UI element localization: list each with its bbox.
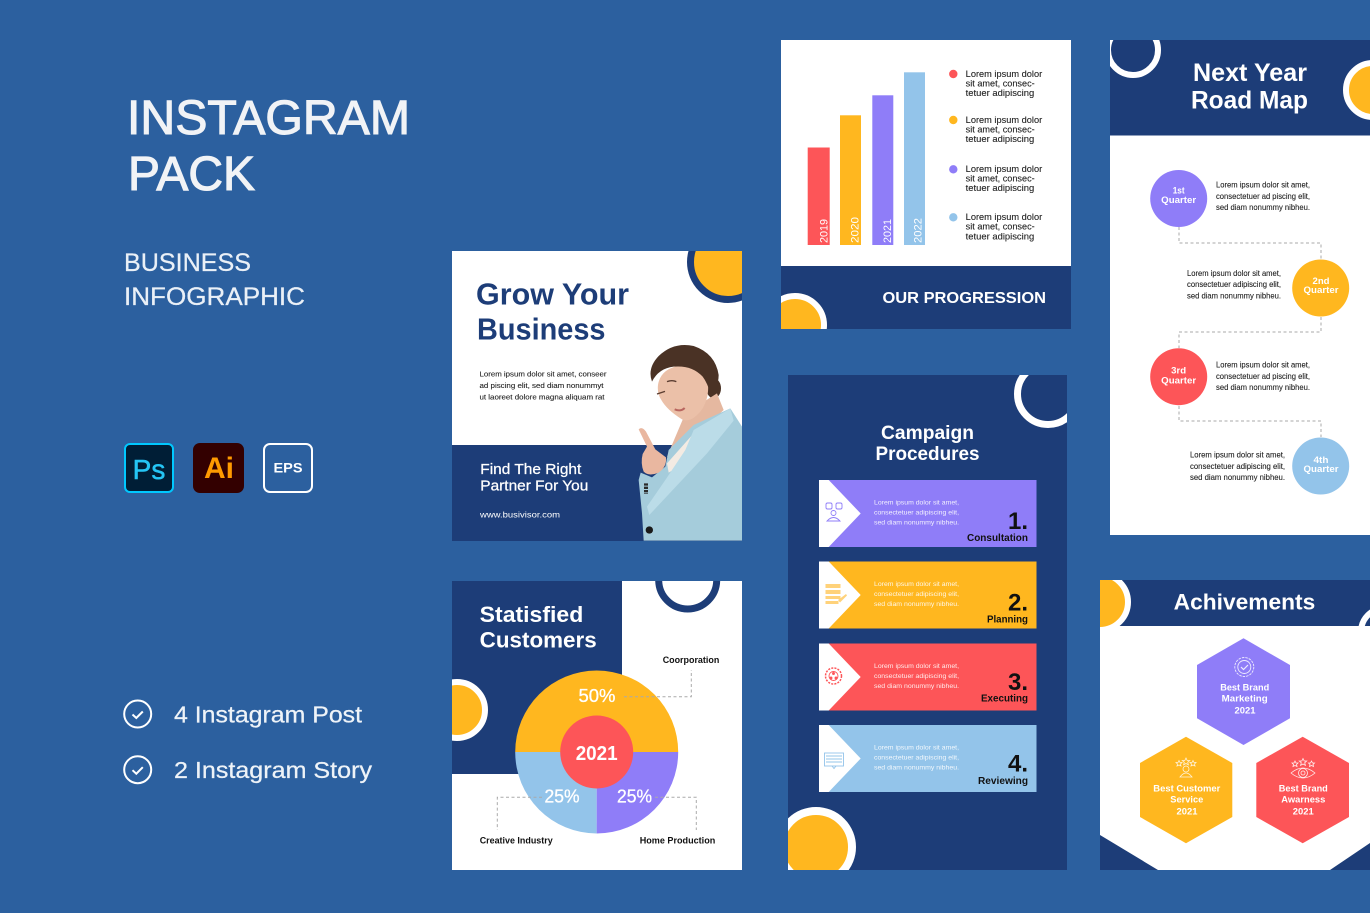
step 4	[819, 725, 1036, 792]
1st quarter: sed diam nonummy nibheu.	[1216, 203, 1310, 212]
body text: ad piscing elit, sed diam nonummyt	[480, 381, 604, 390]
3rd quarter: Quarter	[1161, 376, 1196, 386]
icon: eye stars	[1291, 758, 1315, 778]
corner circle	[687, 251, 742, 303]
2nd quarter: 2nd	[1312, 276, 1330, 287]
pie chart	[515, 670, 678, 834]
hexagon: best customer service	[1140, 737, 1232, 843]
buttons	[646, 526, 653, 534]
pie chart: 25%	[617, 786, 652, 806]
hexagon: best customer service: Service	[1170, 794, 1203, 806]
step 1	[819, 480, 1036, 547]
bar chart: 2019	[818, 219, 830, 243]
hexagon: best brand awareness: Awarness	[1281, 794, 1325, 806]
panel: road map	[1108, 25, 1370, 535]
blazer	[639, 408, 742, 541]
step 1: 1.	[1008, 508, 1028, 535]
4th quarter: Lorem ipsum dolor sit amet,	[1190, 450, 1285, 460]
heading: Road Map	[1191, 86, 1308, 114]
hexagon: best customer service: Best Customer	[1153, 784, 1221, 794]
4th quarter: consectetuer adipiscing elit,	[1190, 462, 1285, 471]
legend: tetuer adipiscing	[966, 134, 1034, 144]
step 3: 3.	[1008, 669, 1028, 696]
legend: Lorem ipsum dolor	[966, 164, 1042, 174]
step 4: consectetuer adipiscing elit,	[874, 755, 959, 762]
panel: achievements	[1072, 574, 1370, 870]
footer band	[452, 445, 742, 541]
4th quarter	[1190, 438, 1349, 494]
hexagon: best brand awareness: 2021	[1293, 806, 1315, 818]
icon: badge	[1235, 658, 1254, 676]
panel: grow your business	[452, 251, 742, 541]
step 3: Executing	[981, 693, 1028, 705]
icon: Photoshop: Ps	[133, 454, 165, 485]
software icons	[125, 443, 312, 493]
legend: Lorem ipsum dolor	[966, 212, 1042, 222]
step 1: Consultation	[967, 532, 1028, 544]
item: 2 Instagram Story: 2 Instagram Story	[174, 757, 373, 783]
icon: EPS	[264, 444, 312, 492]
title: INSTAGRAM	[127, 92, 410, 145]
heading	[876, 425, 979, 460]
4th quarter: sed diam nonummy nibheu.	[1190, 473, 1285, 482]
hexagon: best brand marketing: Marketing	[1222, 694, 1268, 704]
panel: our progression	[781, 40, 1071, 329]
heading: Business	[477, 312, 606, 346]
body text: ut laoreet dolore magna aliquam rat	[480, 392, 605, 401]
footer text: Find The Right	[480, 462, 581, 478]
hexagon: best customer service: 2021	[1176, 806, 1198, 818]
step 3: sed diam nonummy nibheu.	[874, 683, 959, 690]
heading	[477, 283, 629, 340]
step 3	[819, 644, 1036, 710]
legend: sit amet, consec-	[966, 222, 1035, 232]
step 1: sed diam nonummy nibheu.	[874, 520, 959, 527]
icon: customer stars	[1176, 758, 1196, 777]
pie chart: 50%	[578, 686, 616, 706]
step 4: Reviewing	[978, 775, 1028, 787]
pie chart: 25%	[544, 786, 580, 806]
icon: consultation	[826, 503, 842, 521]
step 4: Lorem ipsum dolor sit amet,	[874, 745, 959, 752]
4th quarter: 4th	[1314, 455, 1329, 466]
legend	[949, 69, 1042, 242]
legend: tetuer adipiscing	[966, 88, 1034, 98]
bar chart: 2022	[913, 218, 925, 243]
pie labels: Home Production	[640, 836, 716, 846]
title: PACK	[128, 148, 255, 201]
panel: satisfied customers	[452, 581, 742, 870]
legend: Lorem ipsum dolor	[966, 69, 1042, 79]
heading: Achivements	[1174, 590, 1315, 614]
item: 4 Instagram Post: 4 Instagram Post	[174, 702, 363, 728]
legend: sit amet, consec-	[966, 78, 1035, 88]
footer text: www.busivisor.com	[479, 510, 560, 520]
eyes and mouth	[657, 381, 676, 394]
heading: Grow Your	[476, 276, 629, 312]
heading: Statisfied	[480, 602, 583, 627]
heading	[1191, 59, 1308, 114]
1st quarter: consectetuer ad piscing elit,	[1216, 192, 1310, 201]
3rd quarter	[1150, 348, 1310, 405]
top ring	[1014, 375, 1067, 428]
icon: executing	[826, 668, 842, 684]
legend: sit amet, consec-	[966, 174, 1035, 184]
pie labels: Coorporation	[663, 655, 720, 665]
left circle	[452, 679, 488, 741]
hair bun	[708, 380, 721, 398]
hexagon: best brand marketing: 2021	[1234, 706, 1256, 716]
shirt	[667, 436, 691, 472]
footer title: OUR PROGRESSION	[882, 290, 1046, 307]
connectors	[1179, 227, 1321, 437]
bar chart: 2021	[882, 219, 894, 243]
3rd quarter: consectetuer ad piscing elit,	[1216, 372, 1310, 381]
legend: sit amet, consec-	[966, 124, 1035, 134]
heading	[480, 606, 596, 648]
checklist	[124, 700, 373, 783]
icon: reviewing	[824, 753, 844, 768]
right circle	[1346, 63, 1370, 117]
top ring	[655, 581, 720, 612]
heading: Next Year	[1193, 59, 1307, 87]
icon: Illustrator	[193, 443, 244, 493]
3rd quarter: sed diam nonummy nibheu.	[1216, 383, 1310, 392]
step 3: Lorem ipsum dolor sit amet,	[874, 663, 959, 670]
step 4: sed diam nonummy nibheu.	[874, 765, 959, 772]
bottom corners	[1100, 835, 1370, 870]
top-left ring	[1108, 25, 1158, 75]
pie labels	[480, 655, 720, 846]
hexagon: best brand awareness: Best Brand	[1279, 784, 1328, 794]
bottom circle	[788, 807, 856, 870]
heading: Campaign	[881, 423, 974, 444]
subtitle: BUSINESS	[124, 249, 251, 277]
heading: Procedures	[876, 444, 980, 465]
step 1: consectetuer adipiscing elit,	[874, 510, 959, 517]
3rd quarter: Lorem ipsum dolor sit amet,	[1216, 360, 1310, 370]
legend: tetuer adipiscing	[966, 183, 1034, 193]
step 2: Planning	[987, 614, 1028, 626]
legend: Lorem ipsum dolor	[966, 115, 1042, 125]
3rd quarter: 3rd	[1171, 366, 1186, 376]
icon: Illustrator: Ai	[204, 452, 234, 485]
2nd quarter: consectetuer adipiscing elit,	[1187, 280, 1281, 289]
hexagon: best brand awareness	[1256, 737, 1349, 843]
1st quarter	[1150, 170, 1310, 227]
4th quarter: Quarter	[1304, 464, 1339, 475]
step 2: Lorem ipsum dolor sit amet,	[874, 581, 959, 588]
step 2: sed diam nonummy nibheu.	[874, 601, 959, 608]
photo: businesswoman pointing	[639, 345, 742, 541]
icon: Photoshop	[125, 444, 173, 492]
corner circle	[781, 293, 827, 329]
hexagon: best brand marketing: Best Brand	[1220, 682, 1269, 694]
icon: planning	[826, 584, 847, 604]
panel: campaign procedures	[788, 375, 1067, 870]
step 2	[819, 562, 1036, 628]
bar chart	[808, 72, 925, 245]
body text	[480, 370, 607, 401]
left circle	[1072, 574, 1128, 630]
2nd quarter: sed diam nonummy nibheu.	[1187, 292, 1281, 300]
neck	[667, 393, 724, 457]
subtitle: INFOGRAPHIC	[124, 283, 305, 311]
face	[658, 365, 708, 420]
1st quarter: 1st	[1173, 186, 1185, 197]
step 4: 4.	[1008, 751, 1028, 778]
subtitle	[124, 249, 305, 311]
1st quarter: Quarter	[1161, 195, 1196, 206]
title	[127, 92, 410, 201]
legend: tetuer adipiscing	[966, 232, 1034, 242]
2nd quarter: Lorem ipsum dolor sit amet,	[1187, 269, 1281, 278]
body text: Lorem ipsum dolor sit amet, conseer	[480, 370, 607, 379]
lapel	[647, 408, 734, 515]
hexagon: best brand marketing	[1197, 638, 1290, 745]
footer text	[479, 462, 588, 520]
icon: EPS: EPS	[274, 460, 302, 476]
heading: Customers	[480, 628, 597, 653]
bar chart: 2020	[849, 217, 861, 243]
2nd quarter: Quarter	[1304, 285, 1339, 296]
step 2: 2.	[1008, 590, 1028, 616]
1st quarter: Lorem ipsum dolor sit amet,	[1216, 180, 1310, 190]
2nd quarter	[1187, 260, 1349, 316]
hair	[650, 345, 719, 388]
step 2: consectetuer adipiscing elit,	[874, 591, 959, 598]
right ring	[1361, 608, 1370, 656]
pie labels: Creative Industry	[480, 836, 554, 846]
footer text: Partner For You	[480, 479, 588, 495]
step 1: Lorem ipsum dolor sit amet,	[874, 500, 959, 507]
pie chart: 2021	[576, 743, 618, 765]
hand	[639, 428, 666, 474]
step 3: consectetuer adipiscing elit,	[874, 673, 959, 680]
leader lines	[497, 670, 696, 830]
